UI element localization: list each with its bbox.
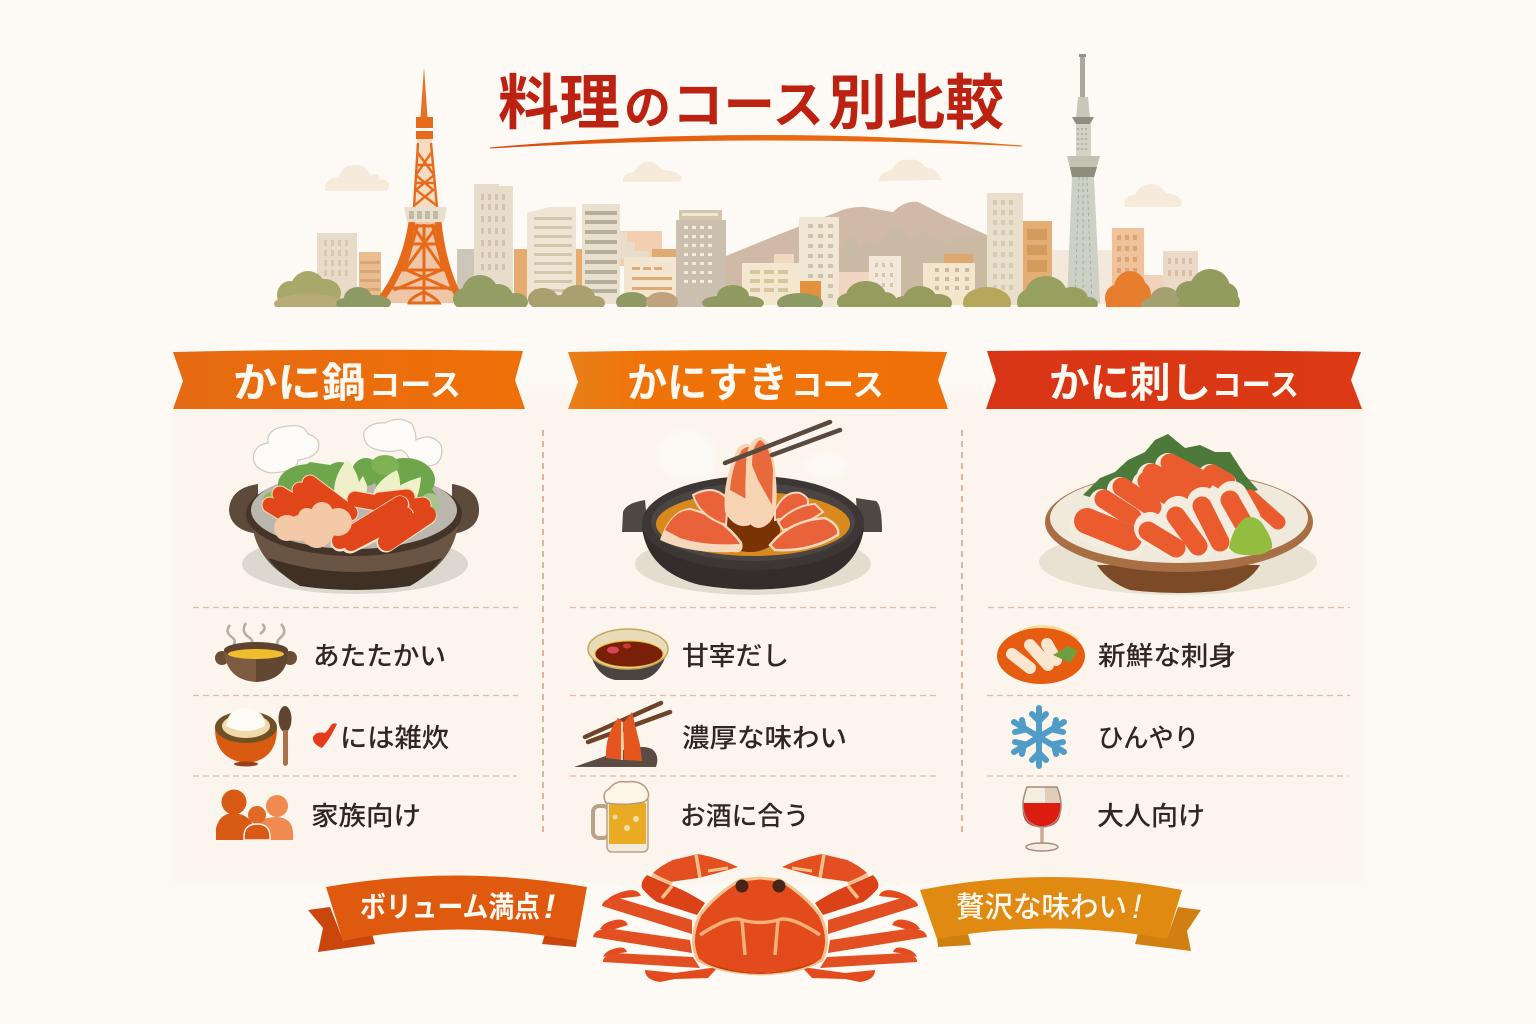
label: rich flavor: 濃厚な味わい (682, 723, 847, 753)
ribbon: volume: ! (544, 888, 555, 926)
illustration: snow crab (593, 854, 927, 982)
ribbon: volume (308, 876, 587, 952)
label: for adults: 大人向け (1097, 801, 1205, 831)
label: warm: あたたかい (313, 641, 446, 671)
banner: kani nabe (173, 350, 525, 409)
title: 別比較 (828, 70, 1004, 137)
panel: kani sashi course (986, 350, 1362, 851)
banner: kani sashi: かに刺し (1049, 360, 1211, 406)
feature: goes with alcohol (593, 782, 809, 852)
label: goes with alcohol: お酒に合う (680, 801, 809, 831)
icon: wine glass (1023, 787, 1061, 851)
icon: small hot pot (215, 623, 297, 682)
feature: sweet broth (588, 629, 789, 680)
feature: chilled (1014, 708, 1199, 766)
banner: kani suki: コース (791, 368, 884, 403)
crab eyes (736, 880, 786, 892)
crab legs in pot (270, 483, 427, 544)
banner: kani sashi (986, 350, 1362, 409)
label: porridge: には雑炊 (340, 723, 449, 753)
steam (253, 419, 442, 473)
icon: broth bowl (588, 629, 668, 680)
banner: kani nabe: かに鍋 (233, 360, 366, 406)
title (498, 70, 1004, 137)
feature: rich flavor (574, 703, 847, 767)
icon: beer mug (593, 782, 649, 852)
scallops (274, 502, 352, 548)
label: family: 家族向け (311, 801, 421, 831)
clouds (325, 160, 1182, 207)
feature: family (216, 790, 421, 840)
feature: for adults (1023, 787, 1205, 851)
label: chilled: ひんやり (1098, 723, 1199, 753)
title underline (490, 135, 1022, 148)
ribbon: luxury: ! (1132, 888, 1142, 926)
icon: family (216, 790, 293, 840)
buildings left (317, 184, 726, 308)
banner: kani suki (568, 350, 948, 409)
icon: rice bowl and spoon (215, 706, 292, 766)
feature: fresh sashimi (997, 627, 1236, 684)
sashimi slices (1086, 463, 1278, 548)
icon: sashimi on plate (997, 627, 1085, 684)
illustration: sukiyaki pan (622, 422, 882, 595)
label: sweet broth: 甘宰だし (682, 641, 789, 671)
icon: snowflake (1014, 708, 1064, 766)
background panel (172, 392, 1364, 882)
crab body (693, 878, 827, 974)
icon: red check mark (313, 723, 337, 748)
legs and claws: left (593, 854, 738, 982)
ribbon: luxury: 贅沢な味わい (956, 891, 1127, 924)
illustration: sashimi plate (1039, 434, 1317, 595)
lifted crab and chopsticks (725, 422, 840, 528)
title: 料理 (498, 70, 620, 137)
illustration: crab hot pot (229, 419, 479, 594)
banner: kani nabe: コース (369, 368, 461, 403)
panel: kani nabe course (173, 350, 525, 840)
Tokyo Skytree (1067, 54, 1100, 303)
ribbon: luxury (920, 877, 1201, 951)
title: の (624, 81, 671, 134)
feature: porridge (215, 706, 449, 766)
banner: kani suki: かにすき (627, 360, 788, 406)
banner: kani sashi: コース (1212, 368, 1299, 403)
label: fresh sashimi: 新鮮な刺身 (1098, 641, 1236, 671)
ribbon: volume: ボリューム満点 (360, 891, 540, 924)
legs and claws: right (782, 854, 927, 982)
title: コース (672, 77, 824, 134)
trees (274, 269, 1240, 307)
crab pieces (660, 490, 838, 552)
dividers (543, 430, 962, 836)
Tokyo Tower (378, 67, 462, 303)
mountain (726, 202, 987, 287)
panel: kani suki course (568, 350, 948, 852)
lettuce and greens (263, 455, 440, 517)
icon: crab with chopsticks (574, 703, 670, 767)
napa cabbage (334, 459, 421, 500)
buildings center and right (742, 193, 1198, 307)
feature: warm (215, 623, 446, 682)
skyline illustration (274, 54, 1240, 319)
